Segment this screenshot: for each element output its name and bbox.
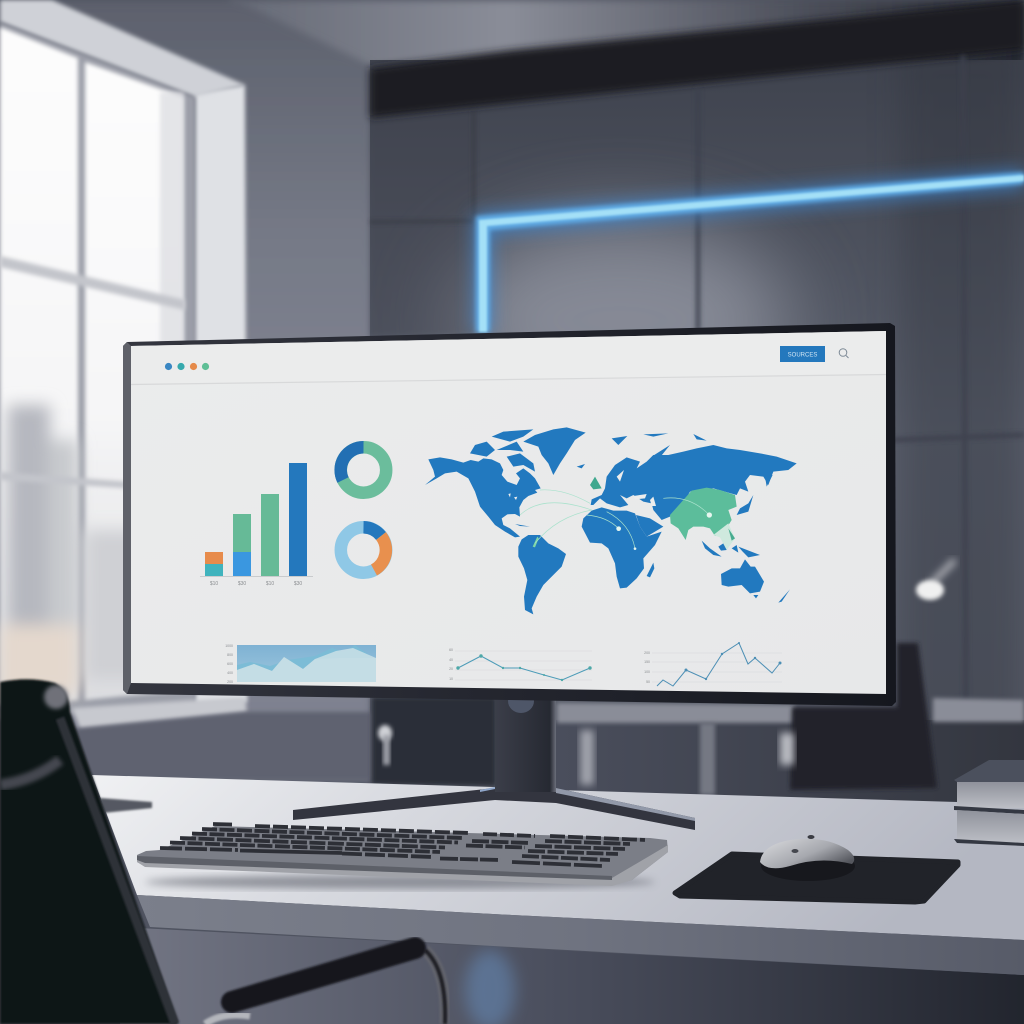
window xyxy=(0,0,372,780)
background furniture xyxy=(372,560,1024,805)
Japan and Sakhalin xyxy=(737,475,773,515)
area chart: 800 xyxy=(227,653,233,657)
keyboard xyxy=(137,824,668,889)
armrest xyxy=(232,948,415,1002)
Arctic islands xyxy=(470,429,535,472)
Eurasia xyxy=(591,445,797,520)
line chart: middle: 60 xyxy=(449,648,453,652)
Africa xyxy=(582,507,662,588)
top band xyxy=(0,0,245,97)
chair band xyxy=(0,760,60,785)
mouse xyxy=(760,835,855,881)
line chart: middle: 10 xyxy=(449,677,453,681)
Arabia xyxy=(636,515,663,537)
donut chart: bottom xyxy=(341,527,386,573)
area chart: 1000 xyxy=(225,644,233,648)
header button xyxy=(780,346,825,362)
header button: SOURCES xyxy=(788,352,817,358)
line chart: right: 50 xyxy=(646,680,650,684)
floor behind desk xyxy=(556,720,1024,805)
Madagascar xyxy=(647,563,654,577)
number pad xyxy=(550,836,645,840)
window reveal xyxy=(195,85,247,705)
line chart: right: 200 xyxy=(644,651,650,655)
area chart xyxy=(225,644,376,684)
wall panel seams xyxy=(698,55,1024,700)
wall below window xyxy=(72,712,372,780)
armrest support xyxy=(425,950,445,1024)
background chairs xyxy=(372,697,496,786)
left wall xyxy=(0,0,372,780)
Australia xyxy=(721,559,764,598)
bar chart: $30 xyxy=(238,581,246,587)
line chart: right xyxy=(644,642,782,686)
monitor xyxy=(123,323,896,706)
desk xyxy=(92,775,1024,1024)
inland gaps xyxy=(508,470,656,506)
Caribbean xyxy=(515,524,530,527)
Iceland and Arctic islands xyxy=(577,433,707,468)
bar chart: $10 xyxy=(266,581,274,587)
line chart: right: 100 xyxy=(644,670,650,674)
books xyxy=(954,760,1024,846)
New Zealand xyxy=(778,589,790,603)
area chart: 200 xyxy=(227,680,233,684)
tablet xyxy=(100,798,152,813)
back desk xyxy=(557,703,795,723)
right wall xyxy=(370,60,1024,800)
Indonesia and Pacific islands xyxy=(702,541,760,557)
keys xyxy=(160,824,645,866)
ceiling xyxy=(230,0,1024,70)
arrow and function keys xyxy=(483,834,535,836)
area chart: 400 xyxy=(227,671,233,675)
chair frame strip xyxy=(60,718,175,1024)
line chart: middle xyxy=(449,648,592,681)
dark ceiling band xyxy=(370,0,1024,118)
bar chart: $10 xyxy=(210,581,218,587)
blurred skyline outside xyxy=(0,405,180,695)
continents xyxy=(425,427,797,614)
line chart: right: 150 xyxy=(644,660,650,664)
map nodes xyxy=(616,512,712,550)
panes xyxy=(0,22,195,720)
mouse pad xyxy=(675,854,958,902)
bar chart: $30 xyxy=(294,581,302,587)
window frame bars xyxy=(0,256,185,492)
status dots xyxy=(165,363,209,370)
world map xyxy=(425,427,797,614)
chair knob xyxy=(44,685,68,709)
South America xyxy=(518,535,566,614)
window sill xyxy=(72,697,247,729)
line chart: middle: 20 xyxy=(449,667,453,671)
office chair xyxy=(0,679,445,1024)
monitor stand xyxy=(293,689,695,830)
area chart: 600 xyxy=(227,662,233,666)
neon blue light xyxy=(474,170,1024,332)
flight arcs xyxy=(520,490,709,548)
line chart: middle: 40 xyxy=(449,658,453,662)
Asia highlight xyxy=(670,488,737,540)
North America xyxy=(425,457,541,537)
dashboard header xyxy=(131,331,886,385)
screen xyxy=(131,331,886,694)
Greenland xyxy=(523,427,586,475)
search icon xyxy=(839,349,848,358)
donut chart: top xyxy=(341,447,386,493)
bar chart xyxy=(200,463,313,587)
background lamp xyxy=(930,560,955,585)
